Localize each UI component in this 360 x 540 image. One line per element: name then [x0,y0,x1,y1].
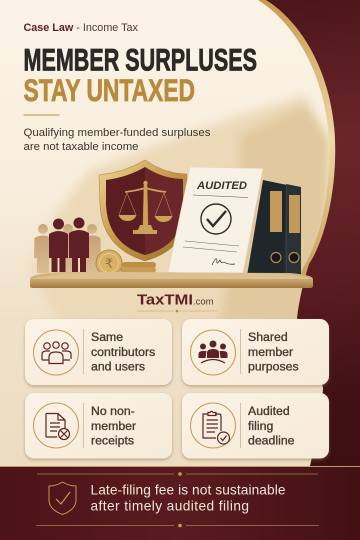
brand: TaxTMI.com [137,292,217,312]
card text: and users [91,360,145,374]
background: watercolour wash [30,95,330,330]
title [24,42,257,108]
shelf [30,272,313,288]
background: maroon curve with gold edge [258,0,360,466]
subtitle [24,127,211,153]
title underline [24,114,60,116]
title: STAY UNTAXED [24,72,195,108]
icon: shield with check [49,482,76,514]
footer message [90,482,286,514]
binders [247,180,301,276]
card text: Same [91,330,123,344]
subtitle: are not taxable income [24,141,138,153]
card text: Shared [248,330,288,344]
icon: solid member group [190,330,236,375]
audited document [168,167,263,278]
card text [248,404,295,448]
card text: receipts [91,434,134,448]
scales shield [99,160,187,261]
card text: No non- [91,404,135,418]
people group [34,218,101,273]
card: shared member purposes [182,319,329,385]
card text [248,330,299,374]
brand: TaxTMI.com: .com [193,296,214,308]
icon: document with prohibition mark [34,403,78,448]
coin stack: ₹ [105,257,113,272]
card text: filing [248,419,273,433]
icon: clipboard with check [190,403,236,448]
card: same contributors and users [25,319,172,385]
icon: group of people outline [34,330,78,375]
footer banner [0,466,360,540]
audited document: AUDITED [196,180,247,192]
brand: TaxTMI.com: TaxTMI [137,292,193,308]
card text: deadline [248,434,295,448]
title: MEMBER SURPLUSES [24,42,257,78]
card: no non-member receipts [25,393,172,458]
card text: contributors [91,345,155,359]
card text [91,404,136,448]
eyebrow: case law label: Case Law - Income Tax [24,22,139,34]
footer message: Late-filing fee is not sustainable [90,482,286,498]
card text: member [91,419,136,433]
coin stack [96,250,156,278]
card text: purposes [248,360,299,374]
card text [91,330,155,374]
footer message: after timely audited filing [90,498,249,514]
card text: member [248,345,293,359]
card: audited filing deadline [182,393,329,458]
card text: Audited [248,404,290,418]
subtitle: Qualifying member-funded surpluses [24,127,211,139]
illustration: audit scene on shelf [30,160,313,288]
